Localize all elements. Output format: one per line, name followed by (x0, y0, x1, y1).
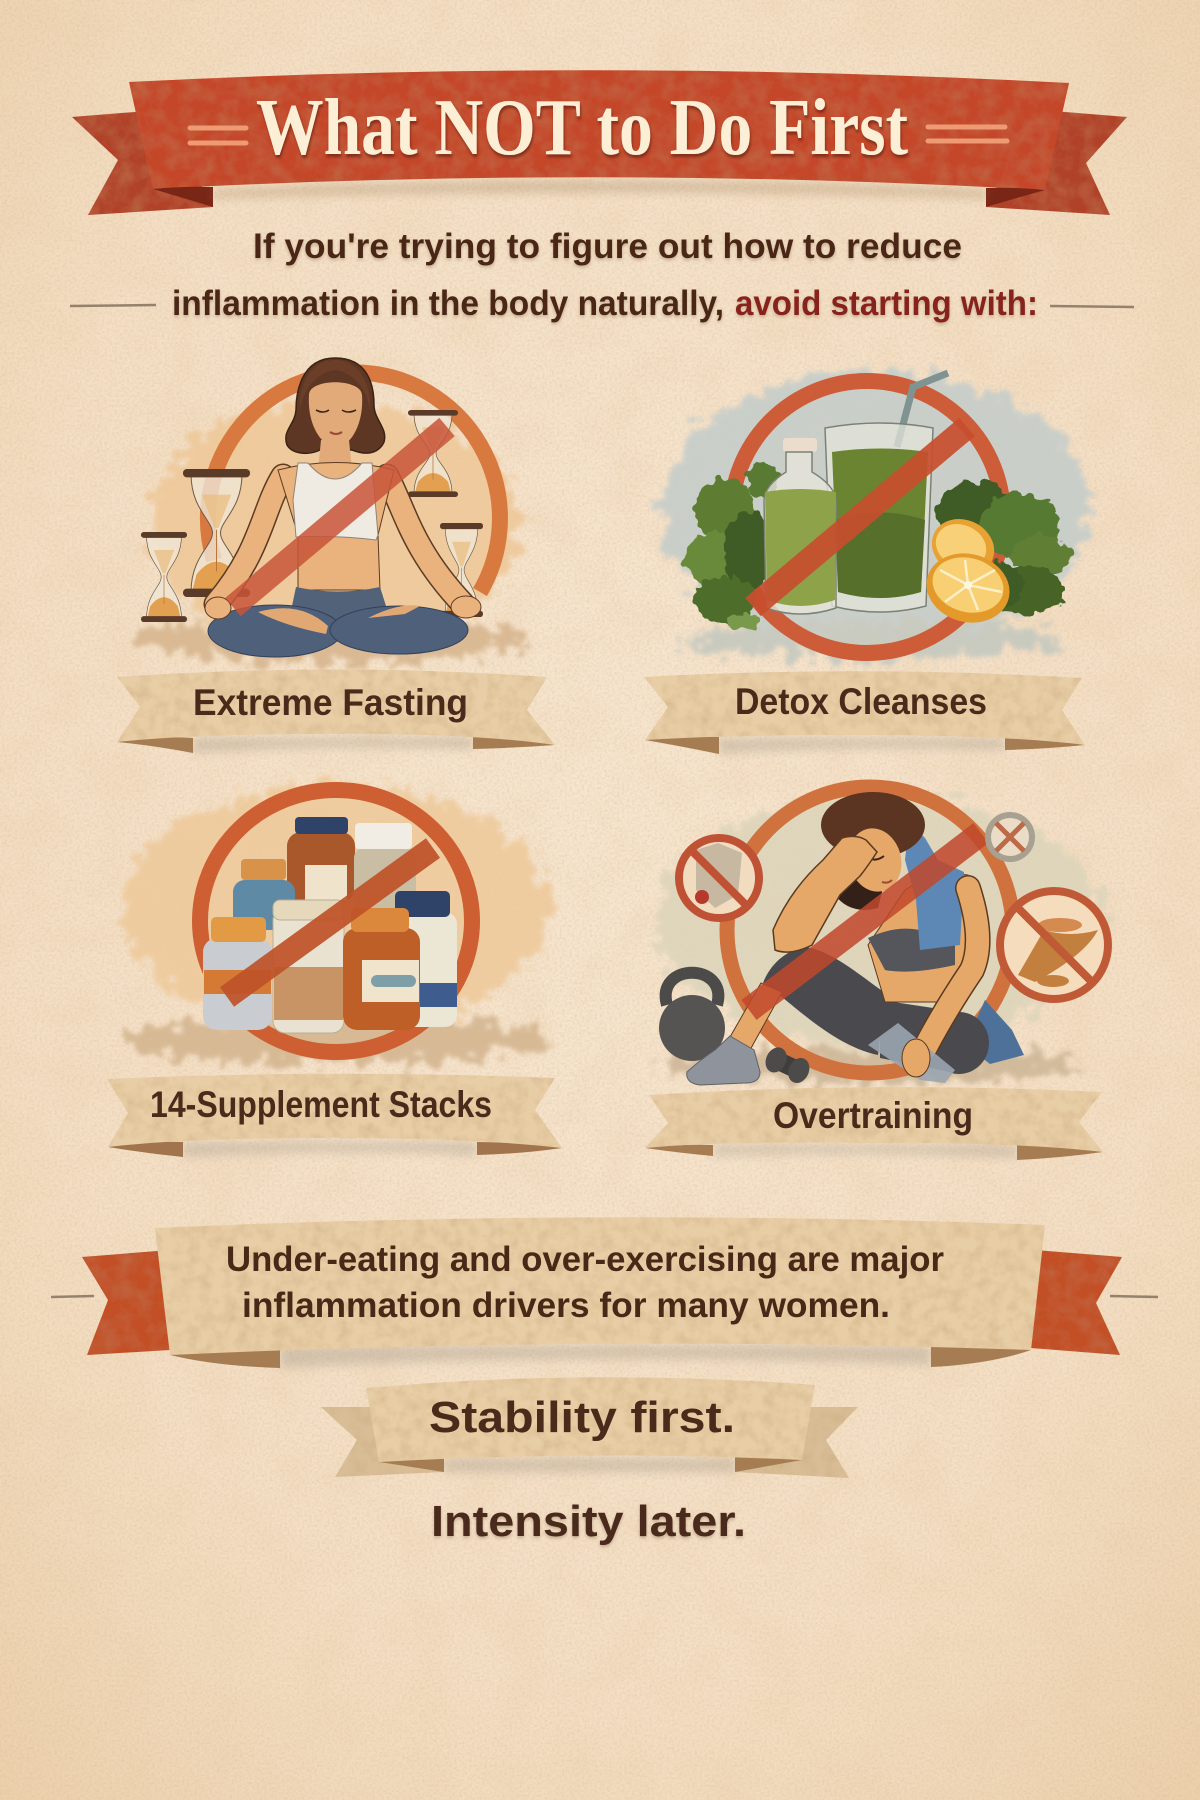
prohibition slash (749, 833, 981, 1010)
central jar (273, 900, 344, 1033)
sports top (868, 925, 955, 972)
icon: kettlebell (659, 973, 725, 1061)
label banner: overtraining (645, 1087, 1103, 1160)
left bottle (203, 917, 272, 1030)
label banner: supplement stacks: 14-Supplement Stacks (150, 1084, 492, 1125)
label banner: extreme fasting (117, 670, 555, 753)
panel: overtraining (645, 787, 1108, 1160)
intro line one: If you're trying to figure out how to reduce (253, 227, 962, 266)
right back bottle (395, 891, 457, 1027)
leafy greens (685, 462, 1070, 631)
icon: supplement bottles (203, 817, 457, 1033)
supporting forearm and hand (773, 836, 877, 952)
label banner: detox cleanses: Detox Cleanses (735, 681, 987, 722)
icon: dumbbell (762, 1044, 813, 1087)
watercolour wash (655, 795, 1105, 1083)
icon: hourglasses (141, 410, 483, 622)
label banner: supplement stacks (107, 1074, 562, 1157)
title decorative stripes (190, 127, 1007, 143)
lower arm (925, 888, 978, 1048)
prohibition slash (227, 848, 433, 997)
prohibition ring (727, 787, 1013, 1073)
icon: small cross no sign (988, 815, 1032, 859)
banner tails (72, 70, 1127, 215)
red ribbon tails (82, 1250, 1122, 1355)
parchment scroll (155, 1217, 1045, 1355)
watercolour wash (660, 370, 1090, 658)
prohibition ring (731, 381, 1003, 653)
towel round neck (905, 822, 964, 950)
water bottle (868, 1023, 955, 1083)
intro line two: inflammation in the body naturally, (172, 284, 724, 323)
lower towel (965, 1000, 1024, 1064)
callout banner: under-eating warning (51, 1217, 1158, 1368)
folded leg (929, 1012, 989, 1074)
face (842, 822, 908, 898)
icon: liver no sign (1000, 891, 1108, 999)
callout line one: Under-eating and over-exercising are major (226, 1240, 944, 1279)
title text: What NOT to Do First (256, 84, 908, 172)
white-capped bottle (354, 823, 416, 918)
blue bottle (233, 859, 295, 930)
front orange bottle (343, 908, 420, 1030)
watercolour wash (120, 785, 550, 1064)
panel: extreme fasting (117, 358, 555, 753)
prohibition ring (208, 372, 500, 592)
intro emphasis: avoid starting with: (735, 284, 1038, 323)
prohibition slash (753, 427, 967, 607)
intro text (70, 227, 1134, 323)
icon: lemons (919, 509, 1017, 632)
panel: supplement stacks (107, 785, 562, 1157)
prohibition ring (200, 790, 472, 1052)
raised leg (763, 947, 885, 1055)
icon: green juice bottle (764, 438, 836, 614)
closing text: intensity later: Intensity later. (431, 1497, 746, 1546)
panel: detox cleanses (644, 370, 1090, 754)
woman meditating (205, 358, 481, 657)
shoe (687, 1036, 760, 1085)
watercolour wash (130, 400, 530, 662)
back brown bottle (287, 817, 355, 902)
hair bun and top (821, 792, 925, 858)
stability text: Stability first. (429, 1393, 735, 1442)
label banner: detox cleanses (644, 671, 1085, 754)
icon: green juice glass (825, 373, 948, 612)
ribbon tails (321, 1407, 858, 1478)
callout line two: inflammation drivers for many women. (242, 1286, 890, 1325)
prohibition slash (233, 427, 447, 607)
torso (868, 874, 985, 1002)
exhausted woman (687, 792, 1024, 1085)
label banner: overtraining: Overtraining (773, 1095, 973, 1136)
label banner: extreme fasting: Extreme Fasting (193, 682, 468, 723)
banner: stability first (321, 1377, 858, 1478)
title banner (72, 70, 1127, 215)
icon: immune shield no sign (679, 838, 759, 918)
